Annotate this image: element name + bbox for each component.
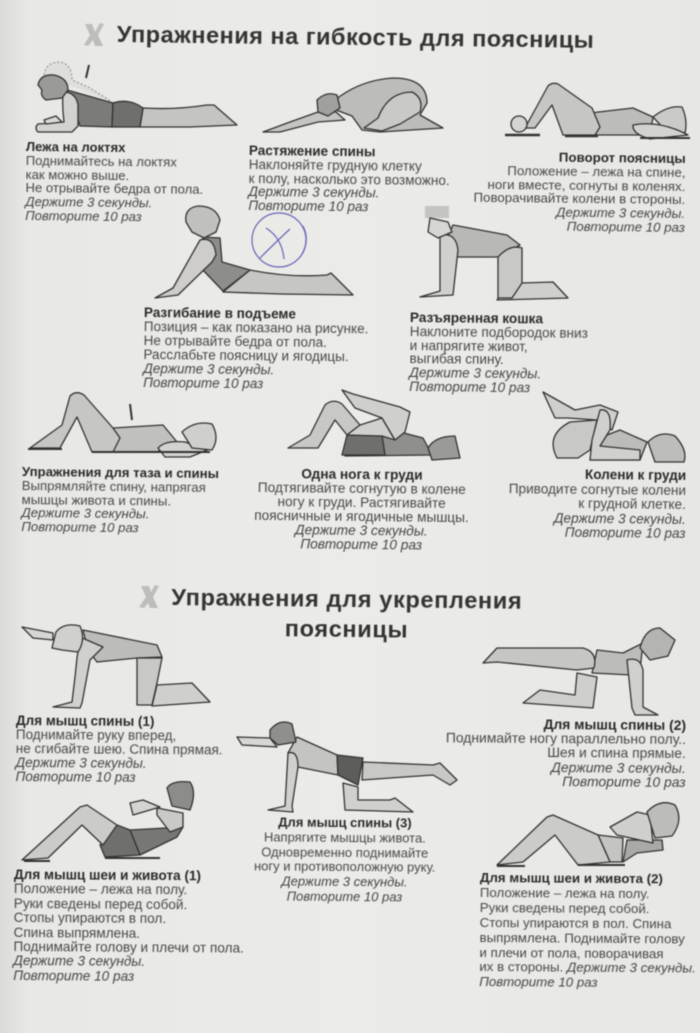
text: back stretch: Повторите 10 раз bbox=[248, 198, 369, 214]
title: strengthening exercises: поясницы bbox=[285, 615, 408, 643]
text: lying on elbows: как можно выше. bbox=[26, 167, 129, 183]
text: pelvis and back: Повторите 10 раз bbox=[21, 519, 139, 535]
text: knees to chest: к грудной клетке. bbox=[578, 496, 686, 512]
text: lumbar rotation: Поворачивайте колени в стороны. bbox=[474, 190, 686, 207]
text: lying on elbows: Поднимайтесь на локтях bbox=[26, 153, 177, 169]
text: knees to chest: Держите 3 секунды. bbox=[554, 510, 686, 526]
text: back muscles 3: Одновременно поднимайте bbox=[261, 844, 428, 860]
text: angry cat: Разъяренная кошка bbox=[410, 310, 543, 326]
figure: neck and abs 2 bbox=[497, 803, 679, 866]
figure: lying on elbows bbox=[36, 62, 237, 132]
text: neck and abs 1: Держите 3 секунды. bbox=[13, 953, 145, 969]
figure: upward extension bbox=[155, 206, 353, 298]
text: back stretch: к полу, насколько это возможно. bbox=[249, 171, 450, 188]
text: lying on elbows: Не отрывайте бедра от пола. bbox=[25, 180, 203, 197]
text: angry cat: и напрягите живот, bbox=[410, 338, 528, 354]
text: neck and abs 1: Для мышц шеи и живота (1) bbox=[14, 867, 201, 883]
icon: grey cross title 2 bbox=[139, 585, 159, 608]
text: neck and abs 1 bbox=[11, 867, 244, 984]
text: neck and abs 2: выпрямлена. Поднимайте голову bbox=[479, 930, 685, 946]
text: neck and abs 1: Руки сведены перед собой. bbox=[14, 896, 187, 912]
title: strengthening exercises bbox=[171, 584, 522, 644]
figure: back stretch bbox=[263, 78, 443, 132]
text: back stretch: Растяжение спины bbox=[249, 143, 376, 159]
text: back muscles 2: Повторите 10 раз bbox=[562, 773, 686, 790]
text: back muscles 3: Повторите 10 раз bbox=[287, 889, 402, 904]
text: one leg to chest bbox=[254, 466, 469, 553]
text: neck and abs 2: Руки сведены перед собой. bbox=[480, 900, 650, 916]
text: back muscles 3: Напрягите мышцы живота. bbox=[264, 829, 426, 845]
text: angry cat: Держите 3 секунды. bbox=[409, 365, 541, 382]
text: knees to chest bbox=[508, 467, 686, 542]
text: lying on elbows bbox=[23, 139, 203, 224]
figure: neck and abs 1 bbox=[22, 782, 194, 861]
figure: one leg to chest bbox=[288, 390, 460, 460]
text: back muscles 2: Для мышц спины (2) bbox=[543, 716, 686, 733]
text: angry cat: Повторите 10 раз bbox=[409, 379, 530, 395]
text: one leg to chest: ногу к груди. Растягивайте bbox=[277, 494, 446, 511]
text: back stretch bbox=[246, 143, 450, 215]
text: knees to chest: Приводите согнутые колени bbox=[508, 481, 686, 497]
text: upward extension bbox=[141, 305, 368, 392]
text: neck and abs 2 bbox=[479, 870, 696, 990]
text: knees to chest: Колени к груди bbox=[585, 467, 686, 483]
text: angry cat bbox=[407, 310, 588, 396]
text: upward extension: Разгибание в подъеме bbox=[144, 305, 296, 322]
text: lying on elbows: Лежа на локтях bbox=[26, 139, 126, 155]
text: neck and abs 1: Положение – лежа на полу. bbox=[14, 881, 187, 898]
title: strengthening exercises: Упражнения для укрепления bbox=[171, 584, 522, 614]
text: neck and abs 1: Стопы упираются в пол. bbox=[14, 910, 166, 926]
text: neck and abs 2: и плечи от пола, поворачивая bbox=[479, 945, 664, 961]
text: lumbar rotation bbox=[474, 150, 686, 235]
text: back stretch: Держите 3 секунды. bbox=[248, 184, 379, 201]
text: one leg to chest: Держите 3 секунды. bbox=[295, 523, 428, 539]
text: angry cat: Наклоните подбородок вниз bbox=[410, 324, 588, 341]
text: pelvis and back bbox=[20, 464, 219, 536]
pen mark: circled cross bbox=[252, 213, 306, 267]
text: back muscles 1: Для мышц спины (1) bbox=[16, 713, 155, 729]
text: lumbar rotation: ноги вместе, согнуты в коленях. bbox=[488, 177, 686, 194]
text: lumbar rotation: Повторите 10 раз bbox=[567, 219, 685, 235]
figure: back muscles 2 bbox=[483, 628, 675, 715]
text: pelvis and back: мышцы живота и спины. bbox=[22, 492, 171, 508]
text: back muscles 1: Поднимайте руку вперед, bbox=[16, 727, 176, 743]
text: one leg to chest: Подтягивайте согнутую в колене bbox=[258, 480, 466, 497]
text: lumbar rotation: Поворот поясницы bbox=[559, 150, 686, 166]
text: back muscles 3 bbox=[254, 815, 435, 904]
text: angry cat: выгибая спину. bbox=[409, 351, 504, 367]
figure: lumbar rotation bbox=[505, 83, 690, 139]
text: lumbar rotation: Держите 3 секунды. bbox=[556, 205, 685, 221]
text: pelvis and back: Держите 3 секунды. bbox=[21, 505, 149, 522]
text: back muscles 1 bbox=[14, 713, 223, 786]
icon: grey cross title 1 bbox=[84, 23, 104, 46]
figure: knees to chest bbox=[543, 392, 685, 462]
text: back muscles 2: Держите 3 секунды. bbox=[551, 759, 686, 776]
text: lumbar rotation: Положение – лежа на спине, bbox=[508, 163, 686, 180]
text: neck and abs 2: Для мышц шеи и живота (2) bbox=[480, 870, 663, 886]
text: back muscles 3: Держите 3 секунды. bbox=[281, 874, 408, 890]
text: upward extension: Расслабьте поясницу и ягодицы. bbox=[143, 347, 349, 364]
text: lying on elbows: Держите 3 секунды. bbox=[25, 194, 152, 211]
text: pelvis and back: Упражнения для таза и спины bbox=[22, 464, 219, 481]
text: neck and abs 1: Повторите 10 раз bbox=[13, 968, 134, 984]
text: one leg to chest: Повторите 10 раз bbox=[300, 537, 422, 553]
text: neck and abs 1: Поднимайте голову и плечи от пола. bbox=[13, 939, 244, 956]
title: flexibility exercises: Упражнения на гибкость для поясницы bbox=[117, 21, 594, 53]
text: back muscles 2: Поднимайте ногу параллельно полу.. bbox=[446, 730, 686, 747]
text: one leg to chest: поясничные и ягодичные мышцы. bbox=[254, 508, 469, 525]
text: neck and abs 2: Стопы упираются в пол. Спина bbox=[480, 915, 672, 931]
text: pelvis and back: Выпрямляйте спину, напрягая bbox=[22, 478, 206, 495]
text: back muscles 2: Шея и спина прямые. bbox=[547, 744, 686, 761]
text: neck and abs 1: Спина выпрямлена. bbox=[13, 925, 140, 941]
text: back muscles 1: Повторите 10 раз bbox=[16, 769, 136, 785]
text: upward extension: Не отрывайте бедра от пола. bbox=[144, 333, 327, 350]
text: back muscles 1: Держите 3 секунды. bbox=[16, 755, 147, 771]
text: one leg to chest: Одна нога к груди bbox=[301, 466, 423, 483]
text: back muscles 2 bbox=[446, 716, 686, 790]
text: back muscles 3: ногу и противоположную руку. bbox=[254, 859, 435, 875]
text: back muscles 1: не сгибайте шею. Спина прямая. bbox=[16, 741, 223, 757]
text: upward extension: Держите 3 секунды. bbox=[143, 361, 274, 377]
figure: back muscles 1 bbox=[22, 625, 210, 708]
text: lying on elbows: Повторите 10 раз bbox=[25, 208, 142, 224]
text: neck and abs 2: их в стороны. Держите 3 секунды. bbox=[479, 959, 696, 976]
text: upward extension: Повторите 10 раз bbox=[143, 375, 263, 391]
text: knees to chest: Повторите 10 раз bbox=[564, 525, 685, 541]
figure: angry cat bbox=[420, 206, 568, 300]
text: back muscles 3: Для мышц спины (3) bbox=[278, 815, 412, 830]
text: upward extension: Позиция – как показано на рисунке. bbox=[144, 319, 368, 336]
figure: back muscles 3 bbox=[237, 722, 457, 812]
text: back stretch: Наклоняйте грудную клетку bbox=[249, 157, 422, 174]
text: neck and abs 2: Повторите 10 раз bbox=[479, 974, 598, 990]
figure: pelvis and back bbox=[28, 393, 216, 457]
text: neck and abs 2: Положение – лежа на полу. bbox=[480, 885, 649, 901]
